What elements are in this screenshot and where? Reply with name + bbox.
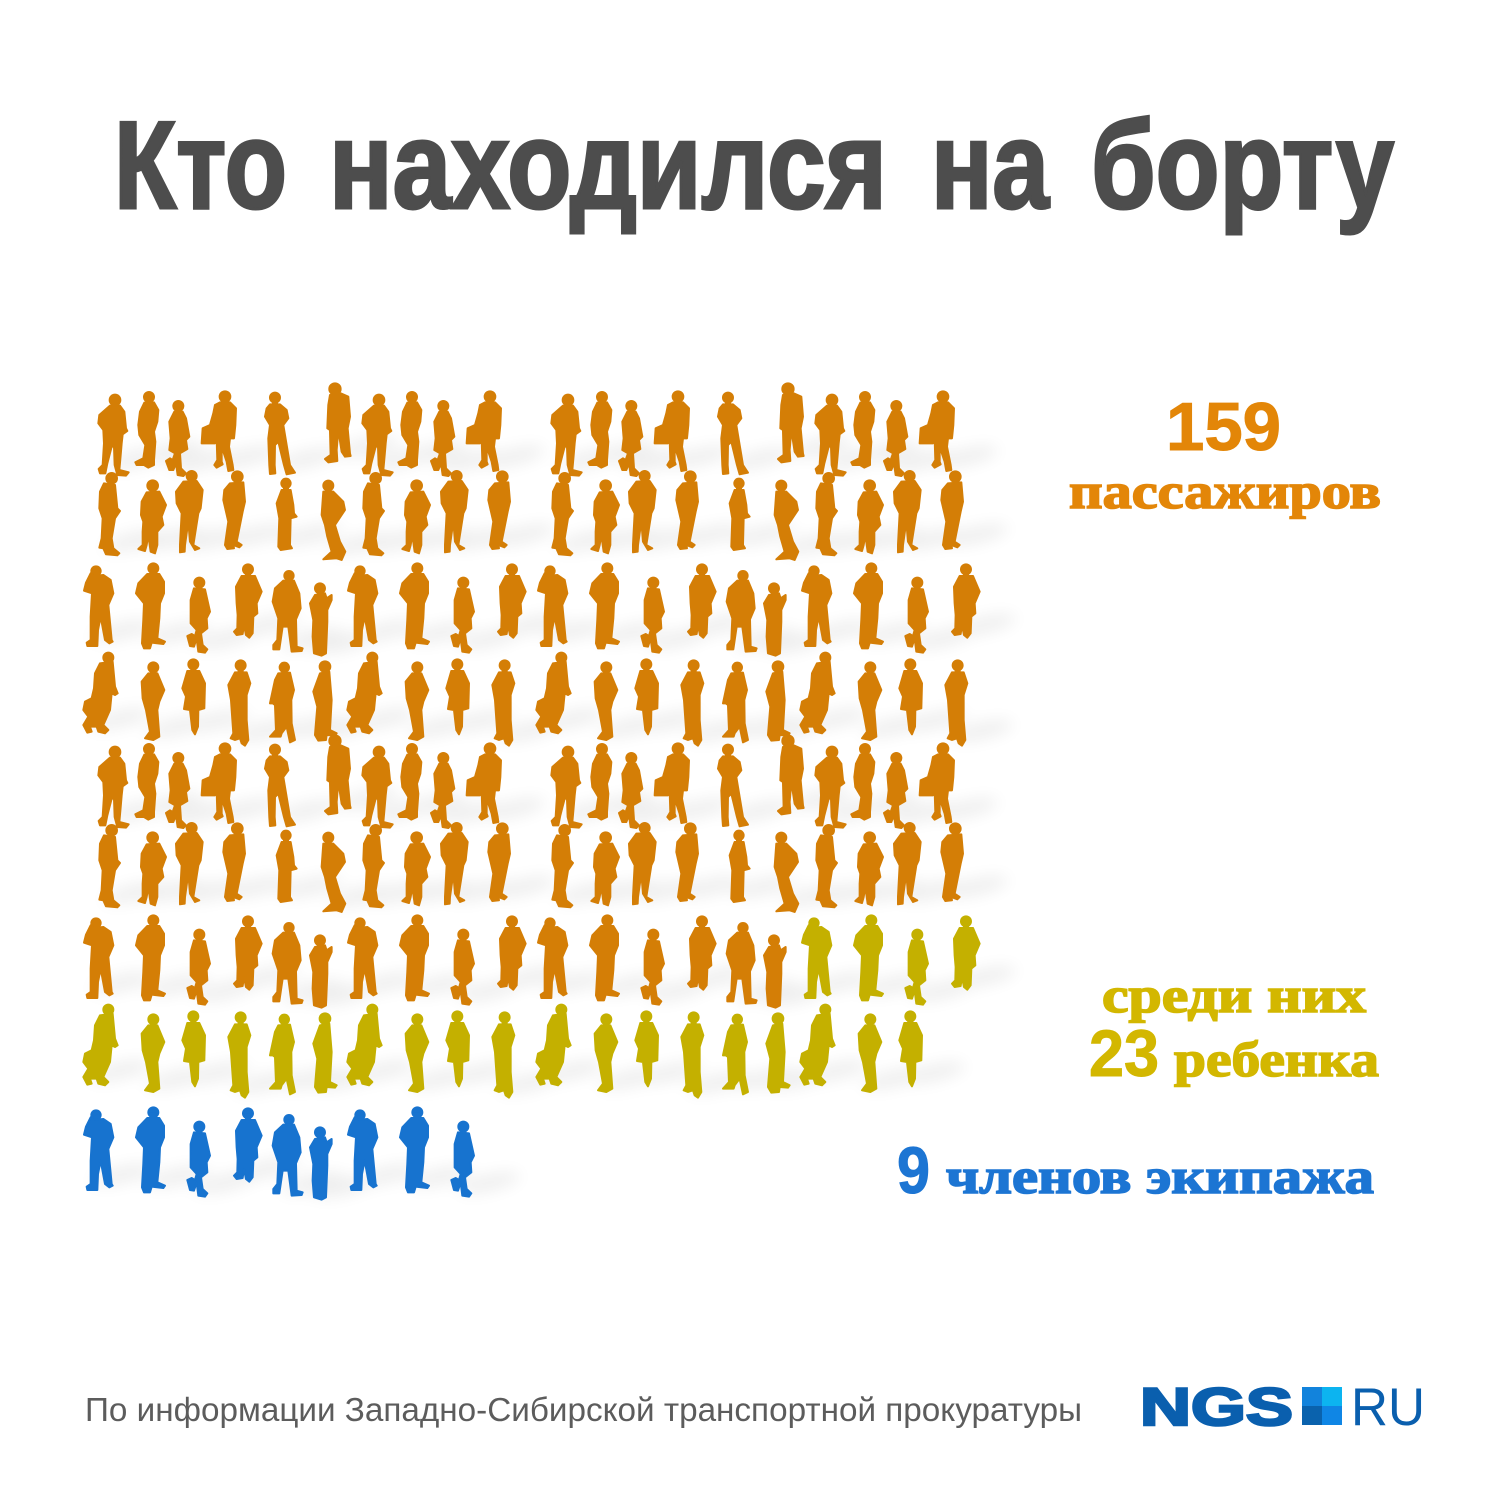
title: находился <box>329 97 887 235</box>
orange passengers <box>83 383 980 1008</box>
label: 9 crew members: 9 <box>897 1133 930 1207</box>
logo: NGS.RU: NGS <box>1140 1378 1293 1437</box>
yellow children <box>83 915 980 1098</box>
label: 23 children: среди них <box>1102 967 1366 1023</box>
source note: По информации Западно-Сибирской транспортной прокуратуры <box>85 1391 1082 1428</box>
title: Кто <box>114 97 287 235</box>
blue crew <box>84 1107 474 1200</box>
label: 159 passengers: 159 <box>1166 389 1281 465</box>
label: 23 children: 23 <box>1089 1016 1159 1090</box>
label: 23 children <box>1089 967 1379 1090</box>
label: 159 passengers <box>1069 389 1381 519</box>
logo: NGS.RU <box>1140 1378 1425 1437</box>
logo: NGS.RU: RU <box>1351 1378 1425 1437</box>
label: 9 crew members <box>897 1133 1374 1207</box>
label: 23 children: ребенка <box>1174 1031 1379 1087</box>
label: 9 crew members: членов экипажа <box>946 1148 1374 1204</box>
figure shadows <box>87 432 1018 1202</box>
title <box>114 97 1394 235</box>
title: на <box>931 97 1050 235</box>
label: 159 passengers: пассажиров <box>1069 463 1381 519</box>
title: борту <box>1091 97 1394 235</box>
people chart: passengers, children and crew <box>83 383 980 1200</box>
